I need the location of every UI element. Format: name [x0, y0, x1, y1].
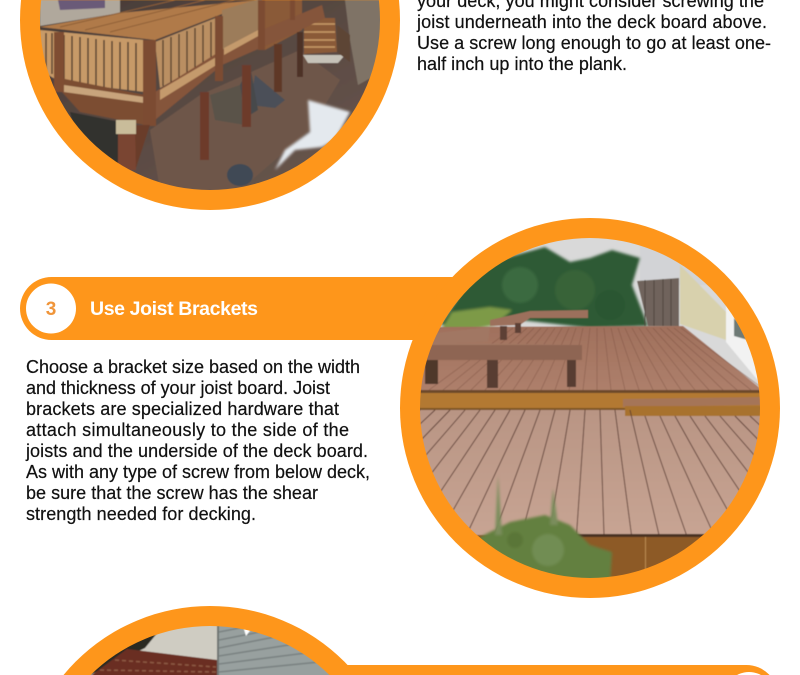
body text: step 3	[25, 357, 370, 524]
body text: step 3: be sure that the screw has the shear	[26, 483, 318, 503]
plant	[480, 475, 612, 585]
body text: step 3: strength needed for decking.	[26, 504, 256, 524]
body text: step 3: Choose a bracket size based on the width	[26, 357, 360, 377]
body text: step 3: and thickness of your joist board. Joist	[26, 378, 330, 398]
photo circle: pergola against siding	[64, 606, 348, 675]
body text: step 2	[416, 0, 771, 74]
shrubs	[440, 247, 648, 334]
photo circle: elevated deck	[20, 0, 400, 210]
step heading: Use Joist Brackets	[90, 298, 258, 320]
body text: step 2: half inch up into the plank.	[417, 54, 627, 74]
body text: step 2: joist underneath into the deck board above.	[416, 12, 767, 32]
step number badge	[724, 672, 774, 675]
body text: step 2: Use a screw long enough to go at least one-	[417, 33, 771, 53]
photo circle: composite deck with benches	[400, 218, 780, 598]
step number badge	[26, 284, 76, 334]
step 3 header bar	[20, 277, 500, 340]
body text: step 3: As with any type of screw from below deck,	[26, 462, 370, 482]
step 4 header bar	[300, 665, 778, 675]
step number badge: 3	[46, 299, 56, 320]
body text: step 3: attach simultaneously to the side of the	[26, 420, 349, 440]
benches	[415, 310, 588, 388]
body text: step 3: joists and the underside of the deck board.	[25, 441, 368, 461]
body text: step 3: brackets are specialized hardware that	[26, 399, 339, 419]
